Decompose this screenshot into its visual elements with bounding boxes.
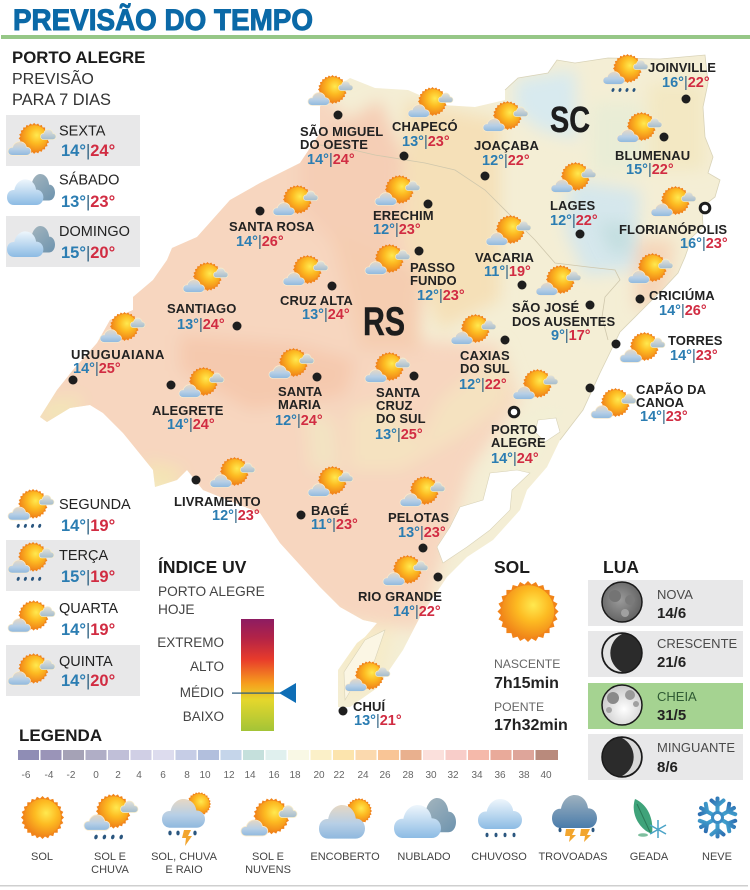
- city: Vacaria: VACARIA: [475, 250, 534, 265]
- moon: crescente: 21/6: [657, 654, 686, 671]
- legend: nublado: NUBLADO: [397, 851, 451, 863]
- city: Florianópolis: FLORIANÓPOLIS: [619, 222, 727, 237]
- city: Santa Maria: SANTA: [278, 384, 323, 399]
- temperature scale: 14: [244, 770, 256, 781]
- city: Blumenau: 15°|22°: [626, 162, 674, 178]
- panel: UV index: ALTO: [190, 659, 224, 674]
- city: Joaçaba: 12°|22°: [482, 153, 530, 169]
- city: Caxias do Sul: [451, 314, 510, 393]
- city: São José dos Ausentes: 9°|17°: [551, 328, 591, 344]
- city: Erechim: 12°|23°: [373, 222, 421, 238]
- city: Alegrete: 14°|24°: [167, 417, 215, 433]
- temperature scale: 6: [160, 770, 166, 781]
- temperature scale: 36: [494, 770, 506, 781]
- city: Criciúma: CRICIÚMA: [649, 288, 715, 303]
- city: Santa Rosa: SANTA ROSA: [229, 219, 315, 234]
- city: Santiago: SANTIAGO: [167, 301, 236, 316]
- city: Chapecó: CHAPECÓ: [392, 119, 458, 134]
- forecast: Sábado: [7, 172, 119, 211]
- city: Lages: [550, 162, 598, 238]
- bottom rule: [0, 885, 748, 886]
- legend: sol e nuvens: [241, 798, 297, 876]
- city: Caxias do Sul: DO SUL: [460, 361, 510, 376]
- temperature scale: -6: [22, 770, 31, 781]
- temperature scale: 16: [268, 770, 280, 781]
- moon: crescente: CRESCENTE: [657, 636, 738, 651]
- temperature scale: 18: [289, 770, 301, 781]
- city: Bagé: BAGÉ: [311, 503, 349, 518]
- panel: sun times: [494, 557, 568, 734]
- city: Santa Cruz do Sul: [365, 352, 426, 443]
- city: Uruguaiana: 14°|25°: [73, 361, 121, 377]
- city: Livramento: 12°|23°: [212, 508, 260, 524]
- city: Passo Fundo: [365, 244, 465, 304]
- city: Alegrete: ALEGRETE: [152, 403, 224, 418]
- legend: neve: NEVE: [702, 851, 732, 863]
- panel: 7-day heading: [12, 48, 145, 109]
- city: Santa Rosa: 14°|26°: [236, 234, 284, 250]
- temperature scale: 8: [184, 770, 190, 781]
- city: Chuí: [338, 661, 402, 729]
- city: Torres: [612, 332, 723, 364]
- icon: sun: [497, 581, 559, 642]
- city: Torres: TORRES: [668, 333, 723, 348]
- forecast: Sexta: 14°|24°: [61, 142, 115, 160]
- legend: sol, chuva e raio: E RAIO: [165, 864, 203, 876]
- city: São José dos Ausentes: SÃO JOSÉ: [512, 300, 579, 315]
- moon: nova: 14/6: [657, 605, 686, 622]
- panel: sun times: SOL: [494, 557, 530, 577]
- forecast: Quarta: [8, 600, 118, 639]
- forecast: Terça: 15°|19°: [61, 568, 115, 586]
- forecast: Quarta: 14°|19°: [61, 621, 115, 639]
- city: Passo Fundo: PASSO: [410, 260, 455, 275]
- city: Chapecó: 13°|23°: [402, 134, 450, 150]
- temperature scale: 22: [333, 770, 345, 781]
- legend: sol e nuvens: NUVENS: [245, 864, 291, 876]
- temperature scale: 28: [402, 770, 414, 781]
- state label: SC: SC: [550, 99, 590, 140]
- city: São José dos Ausentes: DOS AUSENTES: [512, 314, 616, 329]
- city: São Miguel do Oeste: 14°|24°: [307, 152, 355, 168]
- city: Rio Grande: RIO GRANDE: [358, 589, 442, 604]
- forecast: Segunda: 14°|19°: [61, 517, 115, 535]
- city: Uruguaiana: [68, 312, 165, 384]
- city: Bagé: [296, 466, 358, 533]
- city: Rio Grande: 14°|22°: [393, 604, 441, 620]
- legend: neve: [698, 798, 737, 863]
- forecast: Sábado: SÁBADO: [59, 172, 119, 188]
- city: Pelotas: 13°|23°: [398, 525, 446, 541]
- city: Cruz Alta: 13°|24°: [302, 307, 350, 323]
- city: São Miguel do Oeste: [300, 75, 383, 168]
- city: Caxias do Sul: CAXIAS: [460, 348, 510, 363]
- temperature scale: [18, 750, 558, 781]
- city: Santa Cruz do Sul: CRUZ: [376, 398, 413, 413]
- city: Santa Cruz do Sul: 13°|25°: [375, 427, 423, 443]
- temperature scale: 24: [357, 770, 369, 781]
- city: Pelotas: PELOTAS: [388, 510, 449, 525]
- city: Cruz Alta: [280, 255, 353, 323]
- legend: sol: [21, 796, 64, 863]
- temperature scale: -2: [67, 770, 76, 781]
- panel: sun times: 17h32min: [494, 717, 568, 734]
- temperature scale: 0: [93, 770, 99, 781]
- city: Santa Maria: MARIA: [278, 397, 322, 412]
- legend: sol e chuva: [84, 794, 138, 876]
- city: Criciúma: [628, 253, 715, 319]
- city: Chapecó: [392, 87, 458, 160]
- temperature scale: 26: [379, 770, 391, 781]
- legend: geada: [630, 799, 669, 863]
- panel: sun times: NASCENTE: [494, 657, 560, 671]
- city: Uruguaiana: URUGUAIANA: [71, 347, 165, 362]
- city: Passo Fundo: 12°|23°: [417, 288, 465, 304]
- panel: UV index: MÉDIO: [180, 685, 224, 700]
- panel: UV index: HOJE: [158, 602, 195, 617]
- city: Porto Alegre: PORTO: [491, 422, 538, 437]
- city: Blumenau: BLUMENAU: [615, 148, 690, 163]
- city: Criciúma: 14°|26°: [659, 303, 707, 319]
- header rule: [1, 35, 750, 39]
- panel: UV index: [157, 556, 296, 731]
- city: Bagé: 11°|23°: [311, 517, 358, 533]
- temperature scale: 12: [223, 770, 235, 781]
- city: Chuí: CHUÍ: [353, 699, 385, 714]
- lagoon: [437, 470, 530, 563]
- UV level marker: [232, 683, 296, 703]
- panel: 7-day heading: PARA 7 DIAS: [12, 91, 111, 109]
- legend: sol, chuva e raio: SOL, CHUVA: [151, 851, 218, 863]
- city: Capão da Canoa: CAPÃO DA: [636, 382, 707, 397]
- forecast: Segunda: SEGUNDA: [59, 497, 131, 513]
- panel: sun times: 7h15min: [494, 675, 559, 692]
- temperature scale: 10: [199, 770, 211, 781]
- city: Joinville: 16°|22°: [662, 75, 710, 91]
- city: Florianópolis: 16°|23°: [680, 236, 728, 252]
- panel: UV index: EXTREMO: [157, 635, 224, 650]
- temperature scale: 34: [471, 770, 483, 781]
- city: Vacaria: 11°|19°: [484, 264, 531, 280]
- legend: sol e nuvens: SOL E: [252, 851, 284, 863]
- legend: trovoadas: TROVOADAS: [538, 851, 608, 863]
- forecast: Quinta: QUINTA: [59, 654, 113, 670]
- panel: moon phases: LUA: [603, 557, 639, 577]
- city: Alegrete: [152, 367, 224, 433]
- city: Rio Grande: [358, 555, 442, 620]
- city: Porto Alegre: 14°|24°: [491, 451, 539, 467]
- legend heading: LEGENDA: [19, 726, 102, 745]
- city: Livramento: [174, 457, 261, 524]
- city: Porto Alegre: ALEGRE: [491, 435, 546, 450]
- temperature scale: 4: [136, 770, 142, 781]
- legend: trovoadas: [538, 795, 608, 863]
- moon: minguante: MINGUANTE: [657, 740, 735, 755]
- city: Vacaria: [475, 215, 534, 290]
- legend: encoberto: [310, 798, 380, 863]
- city: Santa Maria: [269, 348, 323, 429]
- city: Livramento: LIVRAMENTO: [174, 494, 261, 509]
- legend: sol: SOL: [31, 851, 53, 863]
- panel: sun times: POENTE: [494, 700, 544, 714]
- moon: cheia: 31/5: [657, 707, 686, 724]
- city: Cruz Alta: CRUZ ALTA: [280, 293, 353, 308]
- city: Joaçaba: JOAÇABA: [474, 138, 539, 153]
- forecast: Domingo: 15°|20°: [61, 244, 115, 262]
- forecast: Sábado: 13°|23°: [61, 193, 115, 211]
- moon: nova: [588, 580, 743, 626]
- moon: crescente: [588, 631, 743, 677]
- legend: chuvoso: CHUVOSO: [471, 851, 527, 863]
- city: Lages: LAGES: [550, 198, 596, 213]
- city: Capão da Canoa: CANOA: [636, 395, 685, 410]
- legend: encoberto: ENCOBERTO: [310, 851, 380, 863]
- city: Caxias do Sul: 12°|22°: [459, 377, 507, 393]
- legend: sol, chuva e raio: [151, 792, 218, 876]
- forecast: Quinta: 14°|20°: [61, 672, 115, 690]
- city: Chuí: 13°|21°: [354, 713, 402, 729]
- city: Erechim: ERECHIM: [373, 208, 434, 223]
- city: Blumenau: [615, 112, 690, 178]
- forecast: Segunda: [8, 489, 131, 535]
- UV gradient bar: [241, 619, 274, 731]
- moon: cheia: [588, 683, 743, 729]
- city: Joinville: [603, 54, 716, 104]
- legend: sol e chuva: SOL E: [94, 851, 126, 863]
- city: Joaçaba: [474, 101, 539, 180]
- city: Santiago: [167, 262, 242, 333]
- temperature scale: 30: [425, 770, 437, 781]
- city: Passo Fundo: FUNDO: [410, 273, 457, 288]
- temperature scale: 32: [447, 770, 459, 781]
- legend: nublado: [394, 798, 456, 863]
- moon: cheia: CHEIA: [657, 689, 697, 704]
- city: Santa Cruz do Sul: DO SUL: [376, 411, 426, 426]
- temperature scale: 38: [518, 770, 530, 781]
- city: Erechim: [373, 175, 434, 238]
- city: Florianópolis: [619, 186, 728, 252]
- panel: UV index: BAIXO: [183, 709, 224, 724]
- temperature scale: 20: [313, 770, 325, 781]
- panel: UV index: ÍNDICE UV: [158, 556, 247, 577]
- city: Lages: 12°|22°: [550, 213, 598, 229]
- state label: RS: RS: [363, 300, 405, 344]
- moon: nova: NOVA: [657, 587, 693, 602]
- temperature scale: -4: [45, 770, 54, 781]
- city: São José dos Ausentes: [512, 265, 616, 344]
- city: Capão da Canoa: [586, 382, 707, 425]
- temperature scale: 40: [540, 770, 552, 781]
- forecast: Quinta: [6, 645, 140, 696]
- legend: sol e chuva: CHUVA: [91, 864, 130, 876]
- city: Torres: 14°|23°: [670, 348, 718, 364]
- forecast: Domingo: DOMINGO: [59, 224, 130, 240]
- moon: minguante: [588, 734, 743, 780]
- city: Joinville: JOINVILLE: [648, 60, 716, 75]
- panel: map of RS and SC: [30, 50, 730, 720]
- title: PREVISÃO DO TEMPO: [13, 3, 313, 37]
- forecast: Terça: [6, 540, 140, 591]
- panel: moon phases: [588, 557, 743, 780]
- panel: 7-day heading: PREVISÃO: [12, 68, 94, 88]
- city: Capão da Canoa: 14°|23°: [640, 409, 688, 425]
- legend: geada: GEADA: [630, 851, 669, 863]
- city: Santa Maria: 12°|24°: [275, 413, 323, 429]
- city: Porto Alegre: [491, 369, 558, 467]
- city: Santa Rosa: [229, 185, 318, 250]
- moon: minguante: 8/6: [657, 759, 678, 776]
- city: São Miguel do Oeste: SÃO MIGUEL: [300, 124, 383, 139]
- legend: chuvoso: [471, 799, 527, 863]
- panel: UV index: PORTO ALEGRE: [158, 584, 265, 599]
- panel: 7-day heading: PORTO ALEGRE: [12, 48, 145, 67]
- forecast: Domingo: [6, 216, 140, 267]
- forecast: Sexta: SEXTA: [59, 124, 106, 140]
- city: Santiago: 13°|24°: [177, 317, 225, 333]
- city: Pelotas: [388, 476, 449, 552]
- city: Santa Cruz do Sul: SANTA: [376, 385, 421, 400]
- forecast: Sexta: [6, 115, 140, 166]
- city: São Miguel do Oeste: DO OESTE: [300, 137, 368, 152]
- forecast: Quarta: QUARTA: [59, 601, 118, 617]
- temperature scale: 2: [115, 770, 121, 781]
- forecast: Terça: TERÇA: [59, 548, 108, 564]
